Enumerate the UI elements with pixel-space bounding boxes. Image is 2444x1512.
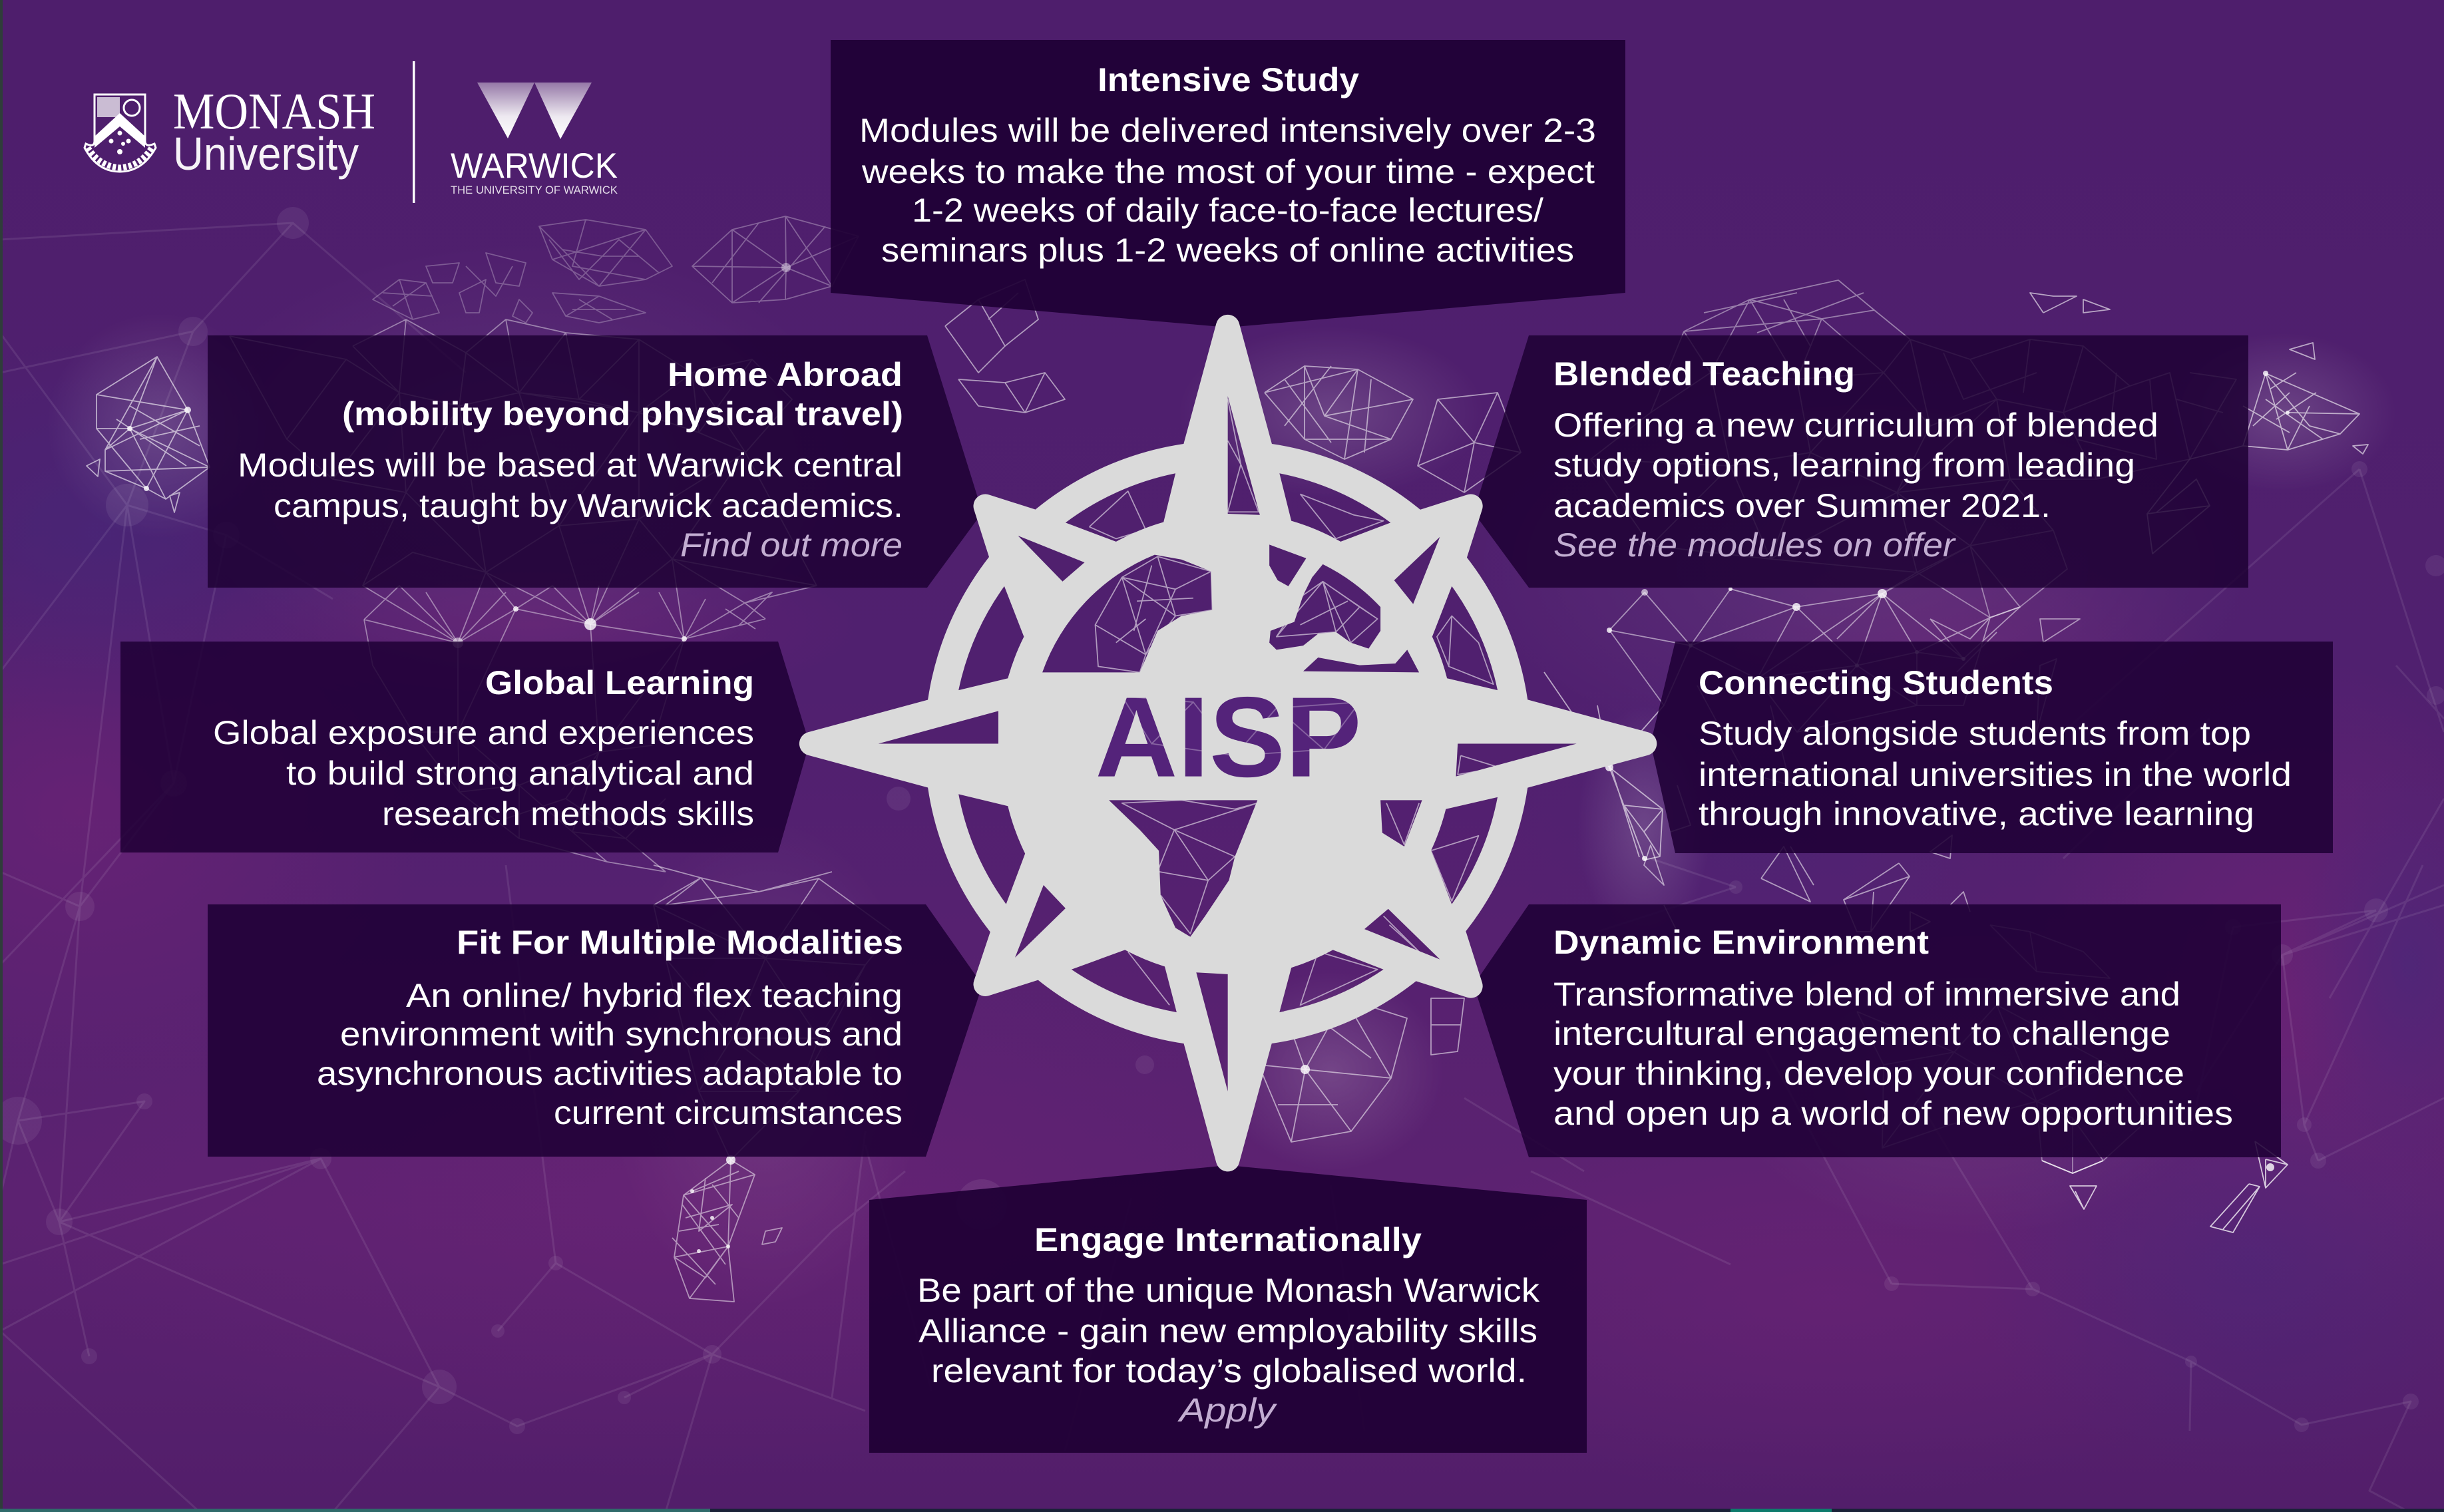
link: find out more: Find out more bbox=[680, 526, 903, 564]
wordmark: University: University bbox=[173, 128, 359, 180]
body text: An online/ hybrid flex teaching bbox=[406, 977, 903, 1014]
body text bbox=[917, 1272, 1540, 1390]
body text: 1-2 weeks of daily face-to-face lectures/ bbox=[912, 192, 1543, 229]
body text: to build strong analytical and bbox=[286, 755, 754, 792]
heading: Blended Teaching bbox=[1553, 355, 1855, 393]
compass star and globe bbox=[783, 298, 1675, 1189]
body text bbox=[1553, 976, 2233, 1132]
body text: current circumstances bbox=[554, 1094, 903, 1131]
panel: Fit For Multiple Modalities bbox=[208, 904, 982, 1157]
wordmark: Monash: MONASH bbox=[173, 83, 375, 140]
panel: Intensive Study bbox=[831, 40, 1625, 327]
body text: intercultural engagement to challenge bbox=[1553, 1015, 2170, 1052]
body text: environment with synchronous and bbox=[340, 1016, 903, 1053]
compass emblem bbox=[783, 298, 1675, 1189]
map: Alaska bbox=[87, 357, 210, 512]
heading: (mobility beyond physical travel) bbox=[342, 395, 903, 433]
panel: Blended Teaching bbox=[1474, 335, 2248, 588]
body text: and open up a world of new opportunities bbox=[1553, 1095, 2233, 1132]
map: Australia bbox=[1857, 925, 2150, 1173]
body text: campus, taught by Warwick academics. bbox=[274, 487, 903, 524]
body text: asynchronous activities adaptable to bbox=[317, 1055, 903, 1092]
panel: Engage Internationally bbox=[869, 1165, 1587, 1453]
body text: academics over Summer 2021. bbox=[1553, 487, 2051, 524]
panel: Connecting Students bbox=[1651, 642, 2333, 853]
link: apply: Apply bbox=[1177, 1392, 1277, 1429]
panel shape bbox=[1651, 642, 2333, 853]
map: Europe bbox=[945, 280, 1521, 492]
heading: Engage Internationally bbox=[1034, 1221, 1422, 1258]
logo: Warwick bbox=[451, 83, 618, 196]
body text: relevant for today’s globalised world. bbox=[931, 1352, 1527, 1390]
icon: Warwick W bbox=[477, 83, 592, 139]
body text: through innovative, active learning bbox=[1699, 795, 2254, 833]
body text bbox=[213, 714, 754, 833]
map: South America bbox=[654, 865, 892, 1302]
map: Indonesia islands bbox=[1644, 835, 1970, 932]
body text bbox=[1553, 407, 2158, 524]
logo divider bbox=[413, 61, 415, 203]
panel shape bbox=[120, 642, 809, 852]
map: Africa south bbox=[1259, 998, 1464, 1142]
map: Asia bbox=[1591, 280, 2236, 618]
body text bbox=[859, 112, 1596, 269]
body text bbox=[238, 447, 903, 524]
map: Middle East band bbox=[1609, 589, 2080, 785]
heading bbox=[342, 356, 903, 433]
map seen through the compass windows bbox=[1090, 399, 1500, 1005]
heading: Home Abroad bbox=[668, 356, 903, 393]
panel shape bbox=[869, 1165, 1587, 1453]
panel shape bbox=[1474, 335, 2248, 588]
soft map glow bbox=[47, 240, 2396, 1311]
panel shape bbox=[1474, 904, 2281, 1157]
wordmark: Warwick: WARWICK bbox=[451, 146, 618, 186]
heading: Fit For Multiple Modalities bbox=[457, 924, 903, 961]
body text: Be part of the unique Monash Warwick bbox=[917, 1272, 1540, 1309]
body text: your thinking, develop your confidence bbox=[1553, 1055, 2184, 1092]
heading: Intensive Study bbox=[1098, 61, 1359, 98]
panel shape bbox=[208, 335, 982, 588]
heading: Dynamic Environment bbox=[1553, 924, 1929, 961]
panel shape bbox=[831, 40, 1625, 327]
panel: Global Learning bbox=[120, 642, 809, 852]
logo: Monash University bbox=[85, 83, 375, 180]
body text: Transformative blend of immersive and bbox=[1553, 976, 2180, 1013]
body text: Modules will be based at Warwick central bbox=[238, 447, 903, 484]
body text bbox=[1699, 715, 2292, 833]
heading: Global Learning bbox=[485, 664, 754, 701]
heading: Connecting Students bbox=[1699, 664, 2053, 701]
body text: research methods skills bbox=[382, 795, 754, 833]
body text: study options, learning from leading bbox=[1553, 447, 2135, 484]
bright map nodes bbox=[127, 263, 2290, 1253]
body text: international universities in the world bbox=[1699, 756, 2292, 793]
body text: weeks to make the most of your time - expect bbox=[861, 153, 1595, 190]
body text: Modules will be delivered intensively over 2-3 bbox=[859, 112, 1596, 149]
map: Greenland bbox=[692, 216, 859, 303]
map: North America bbox=[230, 319, 817, 643]
panel: Dynamic Environment bbox=[1474, 904, 2281, 1157]
icon: Monash crest bbox=[85, 94, 156, 172]
map: arctic islands bbox=[373, 220, 672, 323]
body text: Study alongside students from top bbox=[1699, 715, 2251, 752]
world map network bbox=[87, 216, 2368, 1302]
tagline: the University of Warwick: THE UNIVERSITY OF WARWICK bbox=[451, 184, 618, 196]
body text: seminars plus 1-2 weeks of online activities bbox=[881, 232, 1574, 269]
map: Russia east bbox=[2030, 293, 2368, 554]
body text bbox=[317, 977, 903, 1131]
AISP lettering: AISP bbox=[1096, 674, 1362, 801]
body text: Alliance - gain new employability skills bbox=[918, 1312, 1537, 1350]
link: see the modules: See the modules on offer bbox=[1553, 526, 1957, 564]
map: East Africa bbox=[1544, 672, 1691, 860]
map: New Zealand and Tasmania bbox=[2042, 1141, 2288, 1232]
body text: Global exposure and experiences bbox=[213, 714, 754, 751]
panel: Home Abroad bbox=[208, 335, 982, 588]
body text: Offering a new curriculum of blended bbox=[1553, 407, 2158, 444]
map: central America bbox=[364, 609, 684, 872]
panel shape bbox=[208, 904, 982, 1157]
